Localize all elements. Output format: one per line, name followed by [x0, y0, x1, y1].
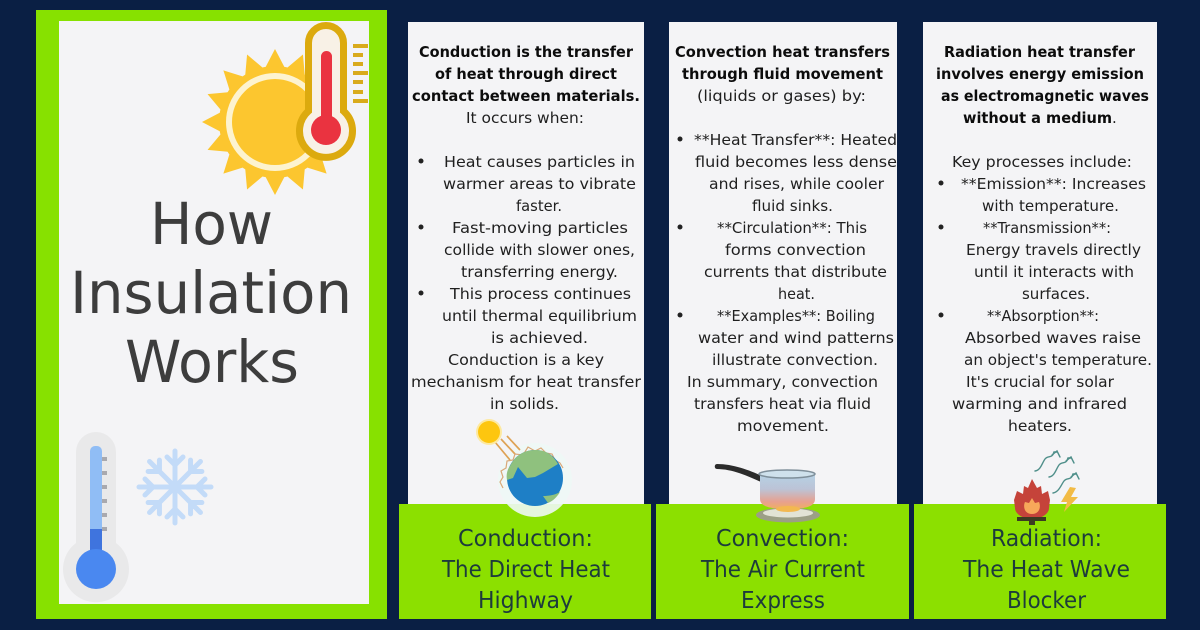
radiation text: Radiation heat transfer	[944, 43, 1136, 61]
radiation text: **Emission**: Increases	[961, 175, 1146, 193]
convection text: (liquids or gases) by:	[697, 87, 866, 105]
radiation text: Key processes include:	[952, 153, 1132, 171]
conduction text: contact between materials.	[412, 87, 640, 105]
convection text: water and wind patterns	[698, 329, 894, 347]
conduction text: mechanism for heat transfer	[411, 373, 642, 391]
convection text: In summary, convection	[687, 373, 878, 391]
conduction text: warmer areas to vibrate	[443, 175, 636, 193]
convection text: **Examples**: Boiling	[717, 307, 875, 325]
label: convection: Convection:	[716, 526, 849, 552]
title text: How	[150, 190, 273, 258]
icon: cold thermometer	[63, 432, 129, 602]
conduction text: faster.	[516, 197, 562, 215]
convection text: currents that distribute	[704, 263, 887, 281]
radiation text: until it interacts with	[974, 263, 1134, 281]
icon: snowflake	[139, 451, 211, 523]
conduction text: Conduction is a key	[448, 351, 604, 369]
convection text: heat.	[778, 285, 815, 303]
label: convection	[656, 504, 909, 619]
label: conduction: The Direct Heat	[441, 557, 610, 583]
convection text: through fluid movement	[682, 65, 883, 83]
convection text	[675, 43, 897, 435]
label: convection: The Air Current	[700, 557, 865, 583]
label: conduction	[399, 504, 651, 619]
label: conduction: Conduction:	[458, 526, 593, 552]
icon: pot on burner	[715, 464, 820, 522]
radiation text: .	[1112, 109, 1117, 127]
label: radiation: The Heat Wave	[962, 557, 1130, 583]
conduction text: until thermal equilibrium	[442, 307, 637, 325]
radiation text: heaters.	[1008, 417, 1072, 435]
convection text: movement.	[737, 417, 829, 435]
conduction text: collide with slower ones,	[444, 241, 635, 259]
convection text: fluid becomes less dense	[695, 153, 897, 171]
radiation text: warming and infrared	[952, 395, 1127, 413]
title text: Insulation	[70, 259, 352, 327]
panel: conduction	[408, 22, 644, 504]
icon: sun	[202, 49, 348, 195]
title text	[70, 190, 352, 396]
label: radiation: Radiation:	[991, 526, 1102, 552]
convection text: **Circulation**: This	[717, 219, 867, 237]
radiation text: with temperature.	[982, 197, 1119, 215]
radiation text: Energy travels directly	[966, 241, 1141, 259]
conduction text: of heat through direct	[435, 65, 617, 83]
radiation text: as electromagnetic waves	[941, 87, 1149, 105]
conduction text: Fast-moving particles	[452, 219, 628, 237]
conduction text	[411, 43, 642, 413]
convection text: illustrate convection.	[712, 351, 878, 369]
conduction text: Heat causes particles in	[444, 153, 635, 171]
panel: convection	[669, 22, 897, 504]
radiation text: **Absorption**:	[987, 307, 1099, 325]
radiation text: without a medium	[963, 109, 1112, 127]
conduction text: transferring energy.	[461, 263, 618, 281]
convection text: **Heat Transfer**: Heated	[694, 131, 897, 149]
conduction text: is achieved.	[491, 329, 588, 347]
icon: campfire and heat waves	[1014, 451, 1079, 525]
panel: radiation	[923, 22, 1157, 504]
label: conduction: Highway	[478, 588, 573, 614]
conduction text: It occurs when:	[466, 109, 584, 127]
convection text: Convection heat transfers	[675, 43, 890, 61]
convection text: forms convection	[725, 241, 866, 259]
radiation text: Absorbed waves raise	[965, 329, 1141, 347]
radiation text: involves energy emission	[936, 65, 1144, 83]
panel: title	[36, 10, 387, 619]
radiation text: surfaces.	[1022, 285, 1090, 303]
convection text: fluid sinks.	[752, 197, 833, 215]
radiation text: **Transmission**:	[983, 219, 1111, 237]
convection text: transfers heat via fluid	[694, 395, 871, 413]
radiation text	[936, 43, 1152, 435]
label: convection: Express	[741, 588, 825, 614]
label: radiation	[914, 504, 1166, 619]
label: radiation: Blocker	[1007, 588, 1086, 614]
icon: hot thermometer	[300, 26, 368, 157]
radiation text: an object's temperature.	[964, 351, 1152, 369]
conduction text: Conduction is the transfer	[419, 43, 634, 61]
conduction text: This process continues	[449, 285, 631, 303]
convection text: and rises, while cooler	[709, 175, 885, 193]
conduction text: in solids.	[490, 395, 559, 413]
icon: sun and earth	[476, 419, 572, 517]
radiation text: It's crucial for solar	[966, 373, 1115, 391]
title text: Works	[125, 328, 299, 396]
